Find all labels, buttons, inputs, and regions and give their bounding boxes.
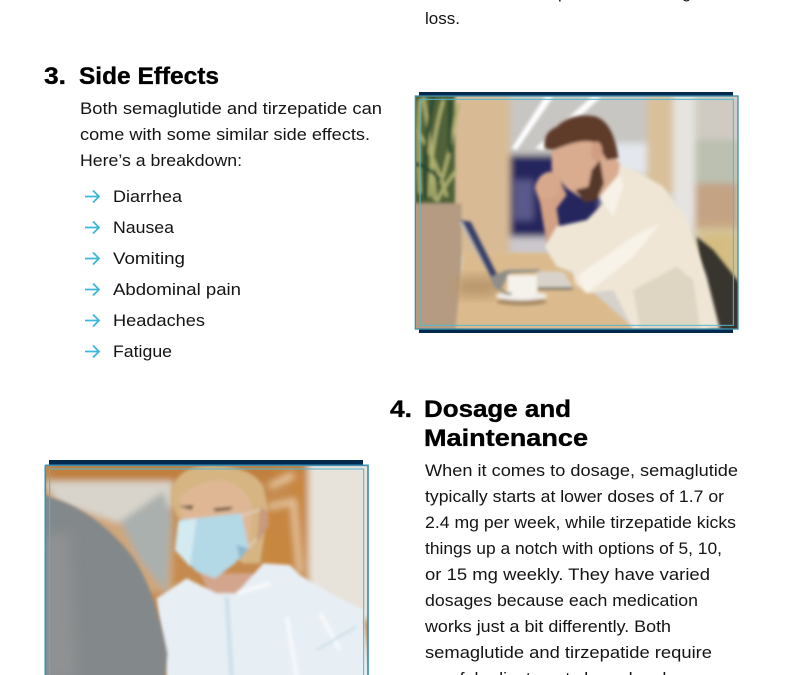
text block: side effects intro: come with some similar side effects. [80, 126, 370, 144]
text block: dosage paragraph: When it comes to dosage, semaglutide [425, 462, 738, 480]
item: Diarrhea: Diarrhea [113, 188, 183, 206]
health worker [157, 466, 370, 675]
text block: end of previous section: loss. [425, 10, 460, 28]
man figure [535, 116, 720, 329]
list: side effects [85, 188, 241, 361]
item: Headaches [85, 312, 205, 330]
text block: dosage paragraph [424, 462, 738, 675]
text block: dosage paragraph: works just a bit differently. Both [424, 618, 671, 636]
item: Diarrhea [85, 188, 183, 206]
text block: dosage paragraph: or 15 mg weekly. They have varied [425, 566, 710, 584]
heading: 3. Side Effects: 3. [44, 63, 66, 90]
item: Fatigue: Fatigue [113, 343, 172, 361]
heading: 4. Dosage and Maintenance: Dosage and [424, 396, 571, 423]
foreground patient shoulder [40, 493, 167, 675]
text block: end of previous section [425, 0, 691, 28]
heading: 4. Dosage and Maintenance: 4. [390, 396, 412, 423]
text block: side effects intro: Both semaglutide and tirzepatide can [80, 100, 382, 118]
heading: 4. Dosage and Maintenance [390, 396, 588, 452]
item: Abdominal pain: Abdominal pain [113, 281, 241, 299]
text block: side effects intro: Here’s a breakdown: [80, 152, 242, 170]
item: Nausea [85, 219, 175, 237]
text block: dosage paragraph: 2.4 mg per week, while tirzepatide kicks [425, 514, 736, 532]
photo: healthcare worker in mask and protective suit [40, 457, 378, 675]
heading: 4. Dosage and Maintenance: Maintenance [424, 425, 588, 452]
heading: 3. Side Effects: Side Effects [79, 63, 219, 90]
item: Vomiting [85, 250, 185, 268]
item: Headaches: Headaches [113, 312, 205, 330]
text block: dosage paragraph: typically starts at lower doses of 1.7 or [425, 488, 725, 506]
coffee cup [496, 275, 548, 306]
item: Vomiting: Vomiting [113, 250, 185, 268]
text block: dosage paragraph: semaglutide and tirzepatide require [425, 644, 712, 662]
item: Nausea: Nausea [113, 219, 175, 237]
laptop [458, 220, 573, 290]
text block: dosage paragraph: things up a notch with options of 5, 10, [425, 540, 722, 558]
item: Fatigue [85, 343, 172, 361]
photo: man at laptop with hand on forehead [413, 92, 740, 333]
text block: dosage paragraph: dosages because each medication [425, 592, 698, 610]
text block: side effects intro [80, 100, 382, 170]
